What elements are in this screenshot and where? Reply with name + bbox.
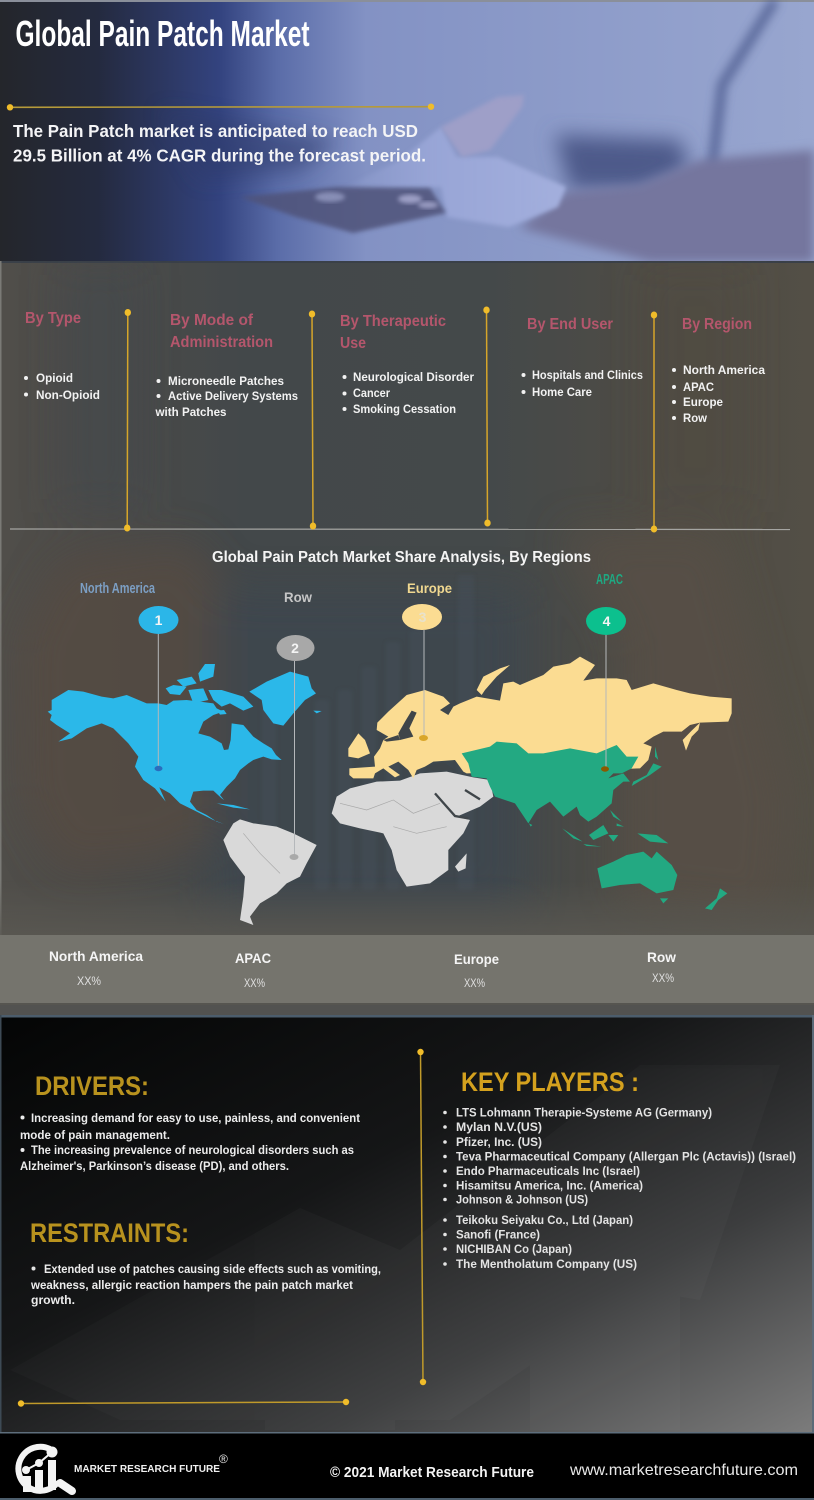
panel: hero xyxy=(0,0,814,262)
panel: segmentation and map background xyxy=(0,261,814,1017)
panel: drivers, restraints and key players xyxy=(0,1015,814,1433)
logo text: ® xyxy=(219,1452,228,1466)
background photo: hands and chart xyxy=(0,557,634,887)
logo icon xyxy=(18,1446,72,1492)
key players list: Pfizer, Inc. (US) xyxy=(456,1137,542,1149)
hero summary text: 29.5 Billion at 4% CAGR during the forecast period. xyxy=(13,146,426,166)
bottom divider line xyxy=(18,1399,349,1407)
callout: North America pin: 1 xyxy=(155,612,163,628)
hero summary text xyxy=(13,121,426,166)
key players list: Hisamitsu America, Inc. (America) xyxy=(456,1180,643,1192)
drivers text: The increasing prevalence of neurological disorders such as xyxy=(31,1143,354,1157)
callout: North America pin xyxy=(80,580,178,771)
panel: footer xyxy=(0,1432,814,1500)
segment: By Type: Opioid xyxy=(36,371,73,385)
key players list: Teikoku Seiyaku Co., Ltd (Japan) xyxy=(456,1215,633,1227)
key players list: Johnson & Johnson (US) xyxy=(456,1194,588,1206)
segment: By Region xyxy=(672,316,765,425)
heading: drivers: DRIVERS: xyxy=(35,1071,149,1101)
segment: By Therapeutic Use xyxy=(340,313,474,416)
segment: By Region: Row xyxy=(683,411,708,425)
key players list: Endo Pharmaceuticals Inc (Israel) xyxy=(456,1166,640,1178)
callout: Europe pin xyxy=(402,580,452,741)
share: North America: North America xyxy=(49,948,143,964)
copyright: © 2021 Market Research Future xyxy=(330,1465,534,1481)
segment: By Region: Europe xyxy=(683,395,723,409)
key players list: Mylan N.V.(US) xyxy=(456,1122,542,1134)
share: Europe: XX% xyxy=(464,976,485,990)
background arrow graphic xyxy=(10,1065,780,1430)
share: Europe xyxy=(454,951,499,990)
key players list xyxy=(443,1108,796,1271)
logo text xyxy=(74,1452,228,1475)
key players list: The Mentholatum Company (US) xyxy=(456,1259,637,1271)
segment: By Mode of Administration: Microneedle Patches xyxy=(168,374,284,388)
key players list: Sanofi (France) xyxy=(456,1230,540,1242)
segment: By Mode of Administration: By Mode of xyxy=(170,312,254,329)
map: Europe and Russia xyxy=(348,657,732,778)
segment: By Mode of Administration: with Patches xyxy=(155,405,227,419)
segment: By Region: APAC xyxy=(683,380,714,394)
segment: By End User: By End User xyxy=(527,316,613,333)
restraints text: growth. xyxy=(31,1293,75,1307)
map section heading: Global Pain Patch Market Share Analysis, By Regions xyxy=(212,549,591,566)
restraints text xyxy=(30,1262,381,1307)
callout: APAC pin: APAC xyxy=(596,572,623,588)
share: Europe: Europe xyxy=(454,951,499,967)
heading: restraints: RESTRAINTS: xyxy=(30,1218,189,1248)
share: Row xyxy=(647,949,676,985)
segment: By Region: North America xyxy=(683,363,765,377)
title: Global Pain Patch Market xyxy=(16,13,310,54)
share: North America: XX% xyxy=(77,974,101,988)
callout: Row pin xyxy=(276,589,314,860)
callout: Row pin: 2 xyxy=(291,640,299,656)
segment: By Mode of Administration: Active Delivery Systems xyxy=(168,389,298,403)
drivers text xyxy=(20,1111,360,1173)
drivers text: Increasing demand for easy to use, painless, and convenient xyxy=(31,1111,360,1125)
map: Africa and Middle East xyxy=(332,772,493,887)
map: South America xyxy=(223,819,317,925)
callout: Row pin: Row xyxy=(284,589,312,605)
share: APAC: APAC xyxy=(235,950,271,966)
restraints text: weakness, allergic reaction hampers the pain patch market xyxy=(30,1278,353,1292)
callout: APAC pin xyxy=(586,572,626,772)
panel: market share strip xyxy=(0,935,814,1003)
share: APAC: XX% xyxy=(244,976,265,990)
heading: key players: KEY PLAYERS : xyxy=(461,1067,639,1097)
segment: By Mode of Administration xyxy=(155,312,298,419)
segment dividers xyxy=(10,306,790,532)
share: Row: XX% xyxy=(652,971,674,985)
segment: By Therapeutic Use: By Therapeutic xyxy=(340,313,446,330)
segment: By Therapeutic Use: Neurological Disorder xyxy=(353,370,474,384)
key players list: NICHIBAN Co (Japan) xyxy=(456,1244,572,1256)
hero photo: bandaged hand xyxy=(160,0,814,262)
segment: By Region: By Region xyxy=(682,316,752,333)
share: Row: Row xyxy=(647,949,676,965)
logo text: MARKET RESEARCH FUTURE xyxy=(74,1463,220,1475)
map: North America xyxy=(48,664,322,824)
map: APAC xyxy=(462,742,727,910)
restraints text: Extended use of patches causing side effects such as vomiting, xyxy=(44,1262,381,1276)
callout: APAC pin: 4 xyxy=(603,613,611,629)
segment: By End User: Hospitals and Clinics xyxy=(532,368,643,382)
hero summary text: The Pain Patch market is anticipated to reach USD xyxy=(13,121,418,141)
hero divider line xyxy=(7,104,434,111)
share: North America xyxy=(49,948,143,988)
drivers text: Alzheimer's, Parkinson’s disease (PD), and others. xyxy=(20,1159,289,1173)
world map xyxy=(48,657,732,925)
segment: By Type xyxy=(24,310,100,402)
segment: By End User xyxy=(522,316,643,399)
segment: By Therapeutic Use: Use xyxy=(340,335,366,352)
callout: Europe pin: 3 xyxy=(419,609,427,625)
callout: North America pin: North America xyxy=(80,580,155,597)
segment: By Type: By Type xyxy=(25,310,81,327)
segment: By Therapeutic Use: Smoking Cessation xyxy=(353,402,456,416)
key players list: LTS Lohmann Therapie-Systeme AG (Germany) xyxy=(456,1108,712,1120)
callout: Europe pin: Europe xyxy=(407,580,452,596)
share: APAC xyxy=(235,950,271,990)
segment: By Therapeutic Use: Cancer xyxy=(353,386,390,400)
website: www.marketresearchfuture.com xyxy=(569,1462,798,1479)
segment: By Type: Non-Opioid xyxy=(36,388,100,402)
drivers text: mode of pain management. xyxy=(20,1128,170,1142)
segment: By End User: Home Care xyxy=(532,385,592,399)
segment: By Mode of Administration: Administration xyxy=(170,334,273,351)
key players list: Teva Pharmaceutical Company (Allergan Plc (Actavis)) (Israel) xyxy=(456,1152,796,1164)
vertical divider line xyxy=(417,1049,426,1385)
